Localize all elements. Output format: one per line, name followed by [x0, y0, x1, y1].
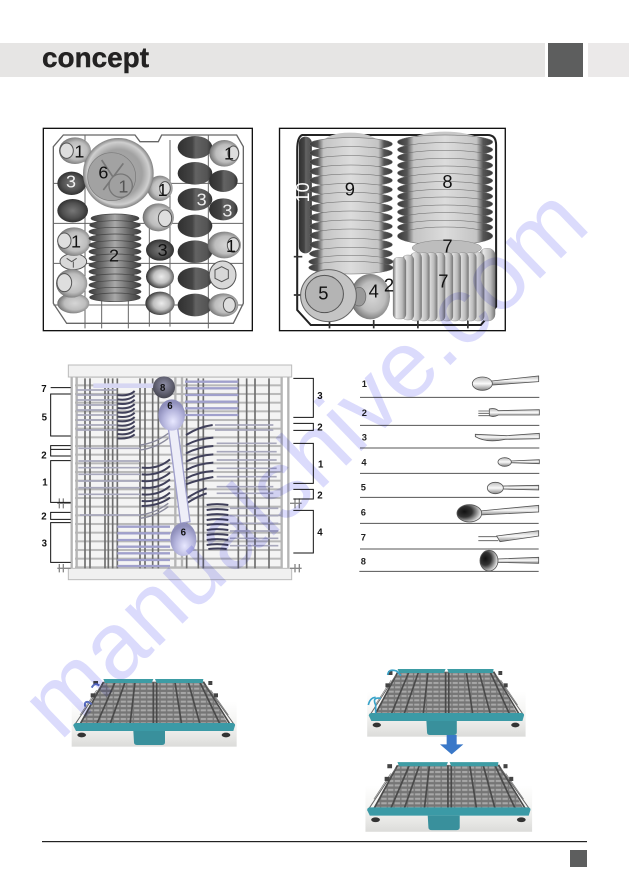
legend numbers: 8: [361, 557, 366, 567]
clips: [57, 498, 302, 572]
labels: 1: [224, 143, 234, 163]
legend numbers: 6: [361, 507, 366, 517]
legend numbers: 5: [361, 482, 366, 492]
labels: 6: [98, 162, 108, 182]
icon: serving fork 7: [478, 531, 539, 542]
legend numbers: 1: [362, 379, 367, 389]
icon: serving spoon 6: [457, 505, 539, 522]
labels: 2: [317, 491, 323, 502]
legend numbers: 4: [361, 457, 367, 467]
header dark page tab: [548, 43, 583, 77]
labels: 1: [118, 176, 128, 196]
light cups: [56, 137, 241, 317]
labels: 8: [160, 383, 166, 394]
legend numbers: 2: [362, 408, 367, 418]
legend numbers: 3: [362, 433, 367, 443]
icon: teaspoon 4: [498, 458, 539, 466]
cup rims: [57, 143, 239, 312]
legend divider lines: [359, 397, 539, 571]
cutlery handles: [77, 390, 278, 546]
panel: lower basket plates: [280, 128, 505, 331]
left dark glasses: [57, 172, 88, 222]
labels: 4: [317, 528, 323, 539]
small cups: [145, 239, 175, 315]
labels: 3: [222, 201, 232, 221]
labels: 3: [42, 538, 48, 549]
bowl 4: [351, 274, 390, 319]
blue knives: [117, 382, 238, 566]
labels: [293, 172, 453, 303]
vertical plates 7: [393, 248, 495, 321]
labels: 6: [181, 527, 187, 538]
blue handle to ladle top: [93, 379, 157, 393]
labels: 2: [41, 451, 47, 462]
top plate 7: [412, 240, 481, 256]
tray frame: [68, 365, 292, 377]
labels: 1: [74, 141, 84, 161]
labels: 7: [41, 384, 47, 395]
labels: [41, 383, 324, 549]
plates stack: [89, 214, 141, 302]
labels: 5: [42, 413, 48, 424]
icon: fork 2: [478, 409, 539, 417]
legend numbers: 7: [361, 532, 366, 542]
labels: 4: [369, 281, 379, 301]
labels: 1: [318, 460, 324, 471]
panel: cutlery tray: [41, 365, 324, 580]
labels: 3: [158, 240, 168, 260]
vertical wires: [85, 378, 269, 568]
labels: 2: [109, 246, 119, 266]
ladle 8: [153, 376, 175, 398]
image: upper rack after lowering: [365, 762, 532, 832]
labels: 1: [226, 236, 236, 256]
labels: 1: [42, 477, 48, 488]
labels: 6: [167, 401, 173, 412]
brackets: [51, 378, 313, 562]
labels: 5: [318, 283, 328, 303]
labels: 3: [197, 189, 207, 209]
panel: cutlery legend: [359, 376, 539, 571]
labels: 9: [345, 180, 355, 200]
legend numbers: [361, 379, 367, 567]
header bar: [0, 43, 545, 77]
labels: 1: [71, 231, 81, 251]
icon: ladle 8: [480, 550, 539, 571]
icon: spoon 1: [472, 376, 539, 390]
icon: spoon 5: [487, 482, 539, 494]
labels: [66, 141, 236, 266]
bowl 5: [301, 270, 356, 322]
logo: concept: concept: [42, 42, 149, 73]
header light tab: [588, 43, 629, 77]
rack outline: [297, 135, 496, 325]
labels: 7: [442, 237, 453, 257]
labels: 2: [41, 511, 47, 522]
large bowl: [83, 138, 154, 209]
page number box: [570, 850, 587, 867]
rack wires upper basket: [53, 135, 243, 328]
dark cutlery heads: [117, 391, 228, 549]
panel: upper basket cups and bowls: [43, 128, 252, 331]
plates stack 9: [309, 133, 393, 274]
labels: 3: [66, 172, 76, 192]
labels: 10: [293, 182, 313, 202]
image: upper rack before lifting: [367, 669, 526, 754]
image: upper rack folded position: [72, 679, 237, 747]
footer rule: [42, 841, 587, 842]
serving spoon 6: [168, 428, 190, 523]
blue hooks: [85, 684, 99, 707]
wine glass hex patterns: [60, 254, 236, 289]
labels: 2: [384, 275, 394, 295]
right dark glasses column: [178, 136, 238, 316]
serving plate 10: [299, 137, 312, 253]
labels: 8: [442, 172, 453, 192]
arrow down: [440, 735, 463, 754]
watermark: manualshive.com: [1, 167, 607, 757]
labels: 1: [158, 180, 168, 200]
labels: 2: [317, 422, 323, 433]
labels: 7: [438, 271, 449, 291]
blue hooks: [368, 670, 401, 713]
icon: knife 3: [475, 433, 539, 441]
plates stack 8: [398, 132, 493, 245]
labels: 3: [317, 391, 323, 402]
